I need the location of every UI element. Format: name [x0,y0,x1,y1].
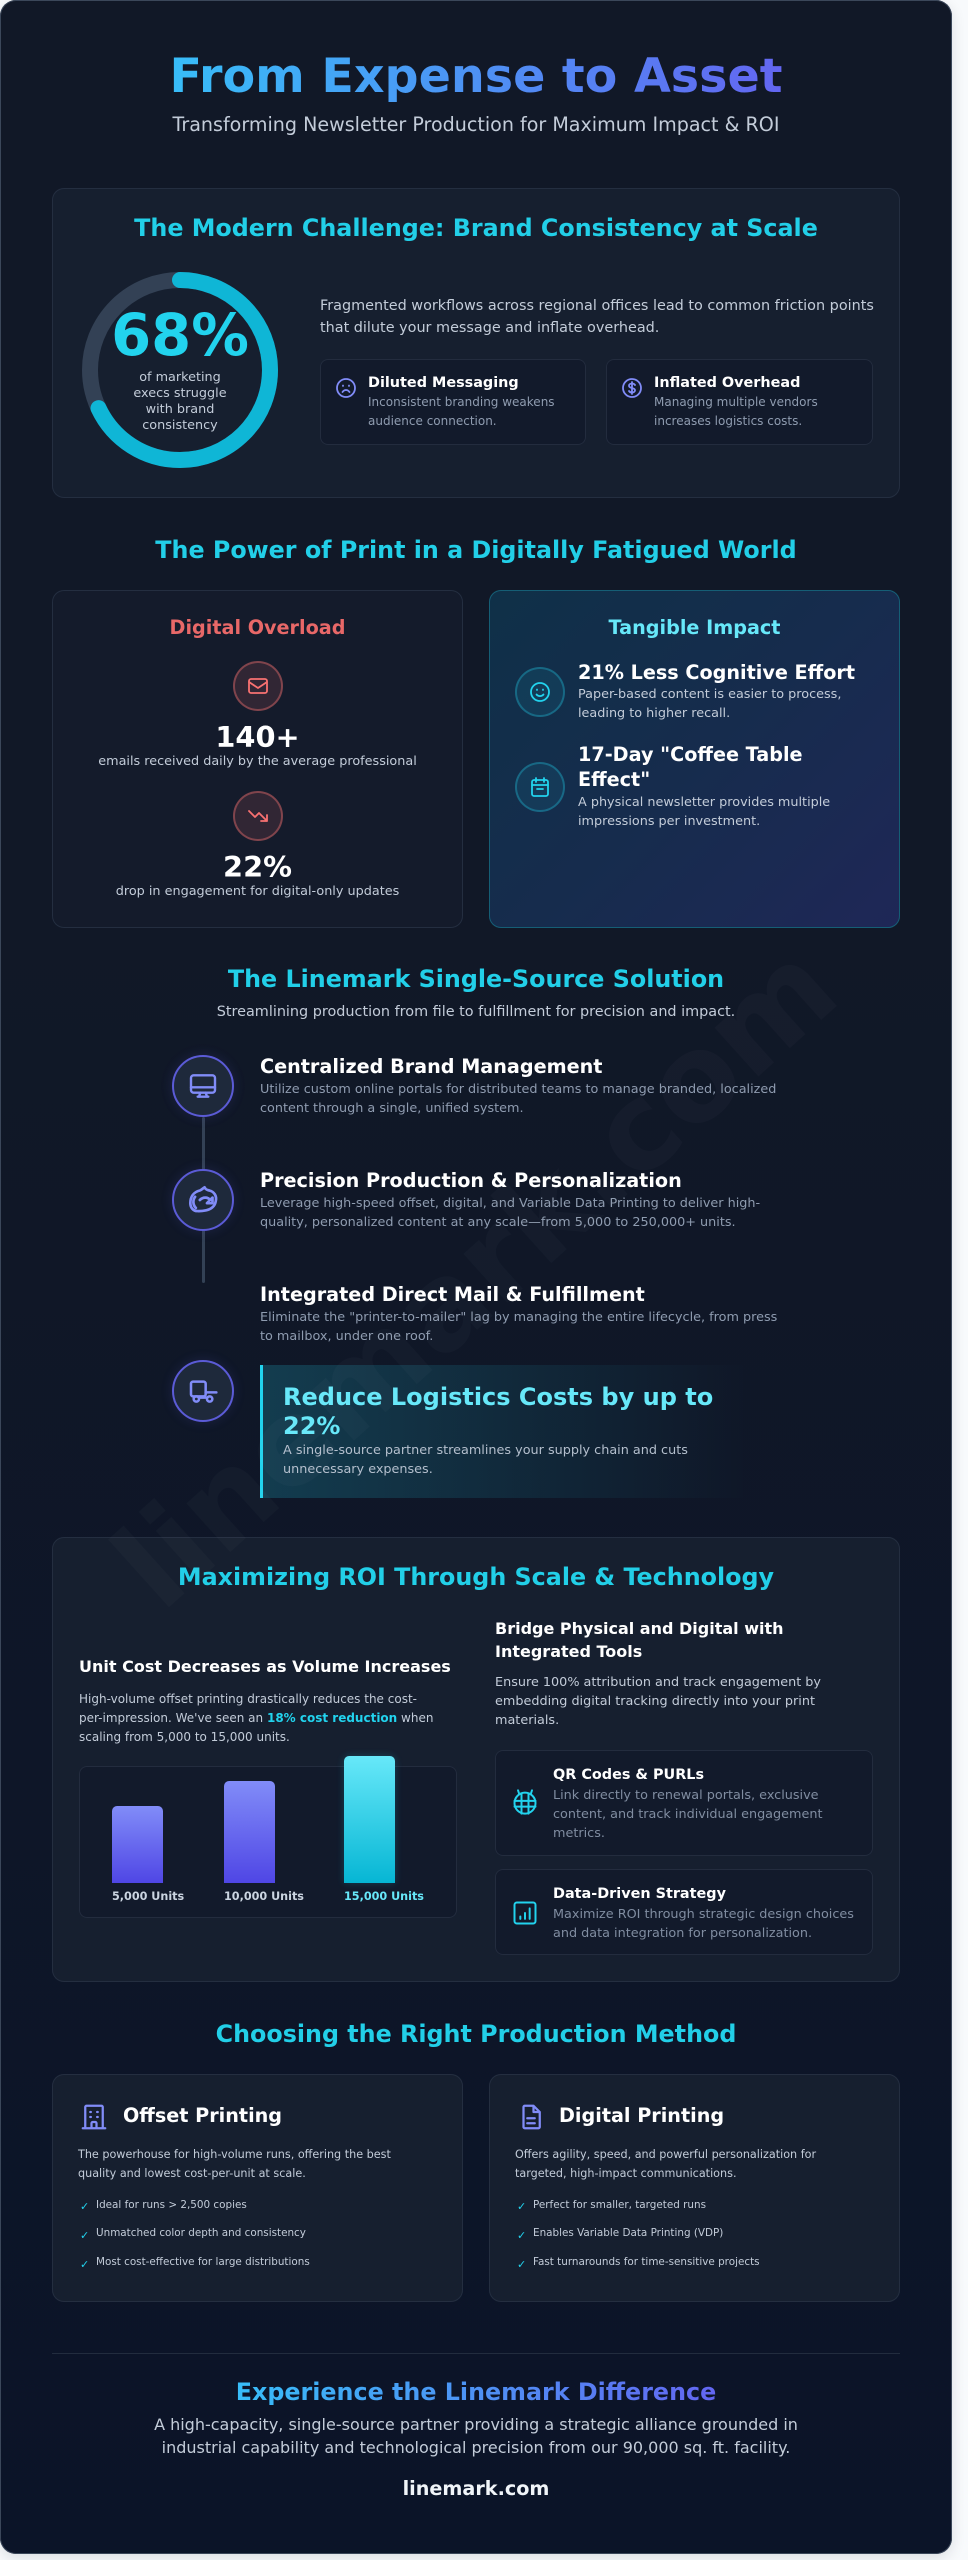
step 2: precision production: Leverage high-speed offset, digital, and Variable Data Printing to deliver high- [260,1196,760,1210]
heading: tangible impact: Tangible Impact [609,616,780,639]
icon: trending down [233,791,283,841]
unit cost text: scaling from 5,000 to 15,000 units. [79,1730,290,1744]
icon: smile [515,667,565,717]
donut chart: 68%: 68% [111,302,249,369]
heading: production method: Choosing the Right Production Method [216,2020,736,2048]
card: QR codes [495,1750,873,1856]
step 1: centralized brand management: content through a single, unified system. [260,1101,524,1116]
icon: desktop [172,1055,234,1117]
card: diluted messaging [320,359,586,445]
digital checklist [517,2199,760,2271]
card: inflated overhead: Managing multiple vendors [654,395,818,409]
unit cost text: High-volume offset printing drastically reduces the cost- [79,1692,417,1706]
step 3: integrated direct mail [260,1283,777,1344]
footer text [154,2415,798,2456]
subtitle: Transforming Newsletter Production for Maximum Impact & ROI [172,113,779,136]
offset text: The powerhouse for high-volume runs, offering the best [78,2148,391,2161]
challenge description [320,298,874,336]
digital text [515,2148,816,2180]
icon: chart [514,1902,536,1924]
panel: tangible impact: Paper-based content is easier to process, [578,687,841,702]
offset checklist: Most cost-effective for large distributions [96,2256,310,2268]
bar label: 10,000 units: 10,000 Units [224,1890,304,1903]
step text: Precision Production & Personalization [260,1169,682,1192]
panel: tangible impact: A physical newsletter provides multiple [578,795,830,810]
stat description: drop in engagement for digital-only updates [116,884,399,899]
step text: Centralized Brand Management [260,1055,602,1078]
donut chart: 68%: of marketing [139,370,221,385]
callout text: A single-source partner streamlines your supply chain and cuts [283,1443,688,1458]
heading: power of print: The Power of Print in a Digitally Fatigued World [155,536,797,564]
footer heading: Experience the Linemark Difference [236,2378,716,2406]
digital checklist: ✓ [517,2258,526,2271]
icon: building [82,2104,106,2130]
bar label: 5,000 units: 5,000 Units [112,1890,184,1903]
step 3: integrated direct mail: to mailbox, under one roof. [260,1329,433,1344]
subheading: bridge physical and digital: Integrated Tools [495,1642,642,1661]
footer text: industrial capability and technological precision from our 90,000 sq. ft. facility. [162,2438,790,2456]
heading: modern challenge: The Modern Challenge: Brand Consistency at Scale [134,214,818,242]
callout heading: Reduce Logistics Costs by up to [283,1383,713,1411]
bridge text: materials. [495,1713,559,1728]
offset checklist: ✓ [80,2258,89,2271]
digital checklist: Perfect for smaller, targeted runs [533,2199,706,2211]
digital checklist: Fast turnarounds for time-sensitive projects [533,2256,760,2268]
icon: refresh [172,1169,234,1231]
callout heading [283,1383,713,1440]
panel: tangible impact: leading to higher recall. [578,706,730,721]
card text: Inflated Overhead [654,375,800,391]
card: QR codes: content, and track individual engagement [553,1807,822,1822]
timeline connector [202,1117,205,1283]
digital text: targeted, high-impact communications. [515,2167,736,2180]
footer text: A high-capacity, single-source partner providing a strategic alliance grounded in [154,2415,798,2434]
digital text: Offers agility, speed, and powerful personalization for [515,2148,816,2161]
offset checklist: ✓ [80,2200,89,2213]
item: coffee table effect: Effect" [578,768,650,791]
callout text [283,1443,688,1477]
icon: mail [233,661,283,711]
step 3: integrated direct mail: Integrated Direct Mail & Fulfillment [260,1283,645,1306]
card text: QR Codes & PURLs [553,1767,704,1783]
bridge text: Ensure 100% attribution and track engagement by [495,1675,821,1690]
footer link: linemark.com [403,2477,549,2500]
card: inflated overhead: increases logistics costs. [654,414,802,428]
panel: tangible impact [489,590,900,928]
challenge description: Fragmented workflows across regional offices lead to common friction points [320,298,874,314]
donut chart: 68% [82,272,278,468]
icon: calendar [515,762,565,812]
item: coffee table effect: 17-Day "Coffee Table [578,743,803,766]
step 1: centralized brand management [170,1052,776,1120]
panel: offset printing [52,2074,463,2302]
bar: 15,000 units [344,1756,395,1883]
digital heading: Digital Printing [559,2104,724,2127]
stat: 140+: 140+ [215,720,300,754]
card: data-driven strategy [495,1869,873,1955]
icon: frown [336,378,356,398]
offset checklist: ✓ [80,2229,89,2242]
subheading: unit cost: Unit Cost Decreases as Volume Increases [79,1657,451,1676]
stat: 22%: 22% [223,850,292,884]
panel: digital printing [489,2074,900,2302]
offset checklist [80,2199,310,2271]
card: QR codes: metrics. [553,1826,605,1841]
stat description: emails received daily by the average professional [98,754,417,769]
step 2: precision production: quality, personalized content at any scale—from 5,000 to 250,000+ units. [260,1215,736,1230]
heading: maximizing ROI: Maximizing ROI Through Scale & Technology [178,1563,774,1591]
bar label: 15,000 units: 15,000 Units [344,1890,424,1903]
donut chart: 68%: execs struggle [133,386,227,401]
offset text [78,2148,391,2180]
heading: linemark solution: The Linemark Single-Source Solution [228,965,724,993]
icon: dollar [622,378,642,398]
item: cognitive effort: 21% Less Cognitive Effort [578,661,855,684]
offset checklist: Ideal for runs > 2,500 copies [96,2199,247,2211]
solution subtitle: Streamlining production from file to fulfillment for precision and impact. [217,1004,735,1020]
digital checklist: Enables Variable Data Printing (VDP) [533,2227,723,2239]
step 3: integrated direct mail: Eliminate the "printer-to-mailer" lag by managing the entire lifecycle, from press [260,1310,777,1325]
step 1: centralized brand management: Utilize custom online portals for distributed teams to manage branded, localized [260,1082,776,1096]
card text: Data-Driven Strategy [553,1886,726,1902]
bridge text [495,1675,821,1728]
step 2: precision production [170,1166,760,1234]
callout: reduce logistics costs [260,1365,748,1498]
offset checklist: Unmatched color depth and consistency [96,2227,306,2239]
challenge description: that dilute your message and inflate overhead. [320,320,659,336]
card: QR codes: Link directly to renewal portals, exclusive [553,1788,819,1802]
digital checklist: ✓ [517,2229,526,2242]
subheading: bridge physical and digital [495,1619,784,1661]
card: diluted messaging: Inconsistent branding weakens [368,395,555,409]
callout heading: 22% [283,1412,340,1440]
card: inflated overhead [606,359,873,445]
card: data-driven strategy: Maximize ROI through strategic design choices [553,1906,854,1922]
offset text: quality and lowest cost-per-unit at scale. [78,2167,306,2180]
bar: 5,000 units [112,1806,163,1883]
panel: modern challenge [52,188,900,498]
item: coffee table effect [578,743,803,791]
donut chart: 68%: consistency [142,418,218,433]
digital checklist: ✓ [517,2200,526,2213]
card: data-driven strategy: and data integration for personalization. [553,1926,812,1941]
offset heading: Offset Printing [123,2104,282,2127]
icon: truck [172,1360,234,1422]
unit cost text [79,1692,433,1744]
bar: 10,000 units [224,1781,275,1883]
heading: digital overload: Digital Overload [170,616,345,639]
bar chart: unit volume [79,1766,457,1918]
panel: maximizing ROI [52,1537,900,1982]
bridge text: embedding digital tracking directly into your print [495,1694,815,1709]
watermark: linemark.com [88,918,863,1636]
subheading: bridge physical and digital: Bridge Physical and Digital with [495,1619,784,1638]
icon: QR globe [514,1789,536,1815]
panel: digital overload [52,590,463,928]
icon: document [522,2104,541,2130]
donut chart: 68%: with brand [146,402,214,417]
callout text: unnecessary expenses. [283,1462,433,1477]
unit cost text: per-impression. We've seen an 18% cost reduction when [79,1711,433,1725]
title: From Expense to Asset [170,49,782,104]
card text: Diluted Messaging [368,375,519,391]
panel: tangible impact: impressions per investment. [578,814,760,829]
card: diluted messaging: audience connection. [368,414,497,428]
